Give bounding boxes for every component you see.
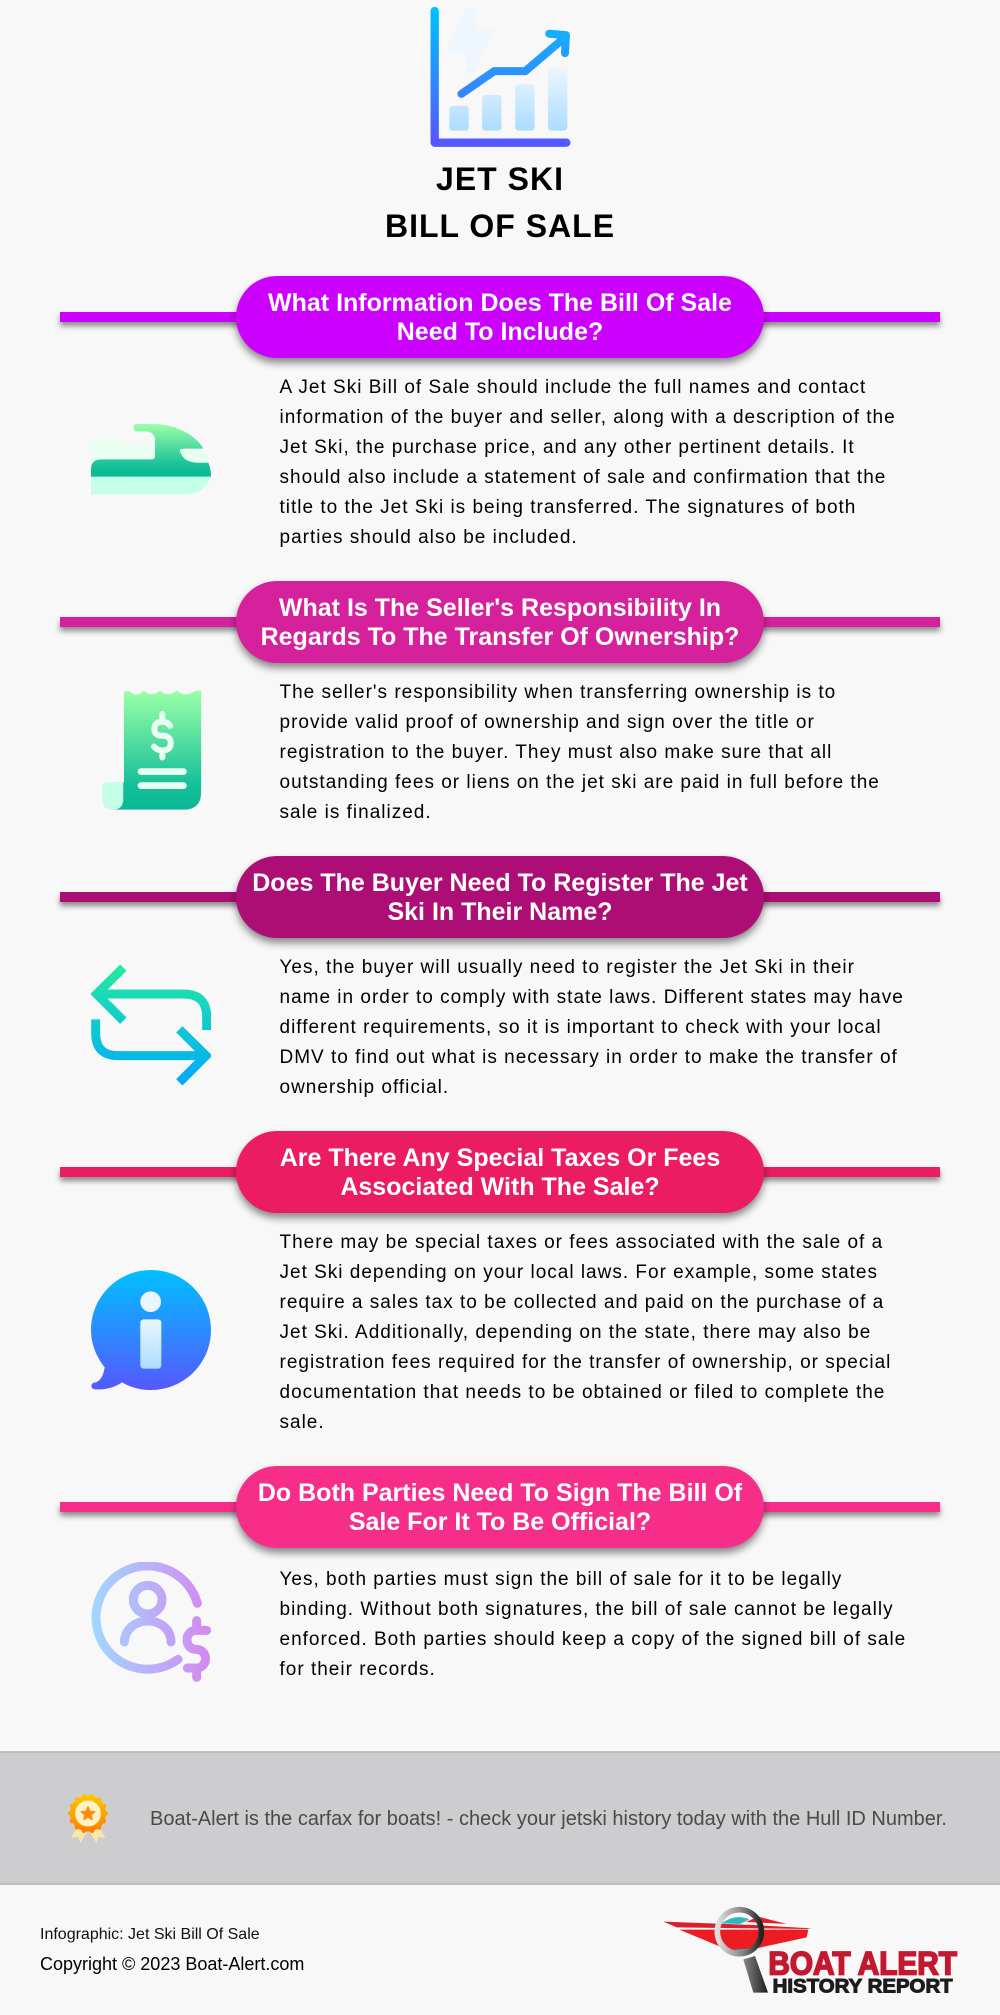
footer credit xyxy=(40,1926,304,1974)
body text: sale is finalized. xyxy=(280,802,432,823)
section heading: What Is The Seller's Responsibility In xyxy=(279,594,721,622)
section heading xyxy=(236,276,764,358)
panel: section 5 xyxy=(56,1466,944,1682)
panel: section 4 xyxy=(56,1130,944,1433)
body text: provide valid proof of ownership and sign over the title or xyxy=(280,712,815,733)
panel: section 1 xyxy=(56,276,944,548)
body text: information of the buyer and seller, along with a description of the xyxy=(280,407,896,428)
body text: outstanding fees or liens on the jet ski are paid in full before the xyxy=(280,772,880,793)
icon: info bubble xyxy=(91,1270,211,1390)
body text: There may be special taxes or fees associated with the sale of a xyxy=(280,1232,883,1253)
title xyxy=(385,161,615,244)
logo: Boat Alert History Report xyxy=(664,1906,958,1997)
body text: different requirements, so it is important to check with your local xyxy=(280,1017,882,1038)
icon: receipt xyxy=(102,690,202,810)
body text: should also include a statement of sale and confirmation that the xyxy=(280,467,886,488)
callout text: Boat-Alert is the carfax for boats! - check your jetski history today with the Hull ID Number. xyxy=(150,1808,947,1830)
section heading: Do Both Parties Need To Sign The Bill Of xyxy=(258,1479,742,1507)
section heading: Are There Any Special Taxes Or Fees xyxy=(280,1144,720,1172)
copyright: Copyright © 2023 Boat-Alert.com xyxy=(40,1954,304,1974)
section heading: Associated With The Sale? xyxy=(340,1173,660,1201)
section heading xyxy=(236,1466,764,1548)
body text: Jet Ski, the purchase price, and any other pertinent details. It xyxy=(280,437,855,458)
section heading: Does The Buyer Need To Register The Jet xyxy=(252,869,748,897)
body text xyxy=(280,957,904,1098)
body text xyxy=(280,1569,906,1680)
body text: ownership official. xyxy=(280,1077,449,1098)
section heading: Ski In Their Name? xyxy=(387,898,613,926)
body text xyxy=(280,682,880,823)
section heading: Need To Include? xyxy=(397,318,603,346)
body text: sale. xyxy=(280,1412,325,1433)
body text: Jet Ski. Additionally, depending on the state, there may also be xyxy=(280,1322,871,1343)
body text: Jet Ski depending on your local laws. For example, some states xyxy=(280,1262,878,1283)
title: BILL OF SALE xyxy=(385,208,615,244)
panel: call to action band xyxy=(0,1751,1000,1885)
icon: growth chart xyxy=(430,6,570,147)
logo: Boat Alert History Report: HISTORY REPORT xyxy=(773,1976,953,1997)
section heading xyxy=(236,856,764,938)
panel: section 2 xyxy=(56,580,944,823)
panel: section 3 xyxy=(56,856,944,1098)
body text: require a sales tax to be collected and paid on the purchase of a xyxy=(280,1292,884,1313)
body text: parties should also be included. xyxy=(280,527,578,548)
section heading: What Information Does The Bill Of Sale xyxy=(268,289,732,317)
body text: Yes, the buyer will usually need to register the Jet Ski in their xyxy=(280,957,855,978)
section heading: Sale For It To Be Official? xyxy=(349,1508,651,1536)
infographic name: Infographic: Jet Ski Bill Of Sale xyxy=(40,1926,260,1943)
section heading xyxy=(236,1131,764,1213)
body text: name in order to comply with state laws. Different states may have xyxy=(280,987,904,1008)
logo: Boat Alert History Report: BOAT ALERT xyxy=(768,1946,957,1982)
header rule xyxy=(60,892,940,902)
section heading: Regards To The Transfer Of Ownership? xyxy=(261,623,739,651)
header rule xyxy=(60,617,940,627)
section heading xyxy=(236,581,764,663)
body text xyxy=(280,377,896,548)
body text xyxy=(280,1232,891,1433)
header rule xyxy=(60,312,940,322)
icon: award medal xyxy=(68,1794,108,1843)
header rule xyxy=(60,1502,940,1512)
body text: A Jet Ski Bill of Sale should include the full names and contact xyxy=(280,377,866,398)
icon: transfer arrows xyxy=(91,965,211,1085)
icon: person with dollar xyxy=(92,1562,211,1682)
body text: documentation that needs to be obtained or filed to complete the xyxy=(280,1382,885,1403)
body text: registration fees required for the transfer of ownership, or special xyxy=(280,1352,891,1373)
body text: binding. Without both signatures, the bill of sale cannot be legally xyxy=(280,1599,894,1620)
body text: title to the Jet Ski is being transferred. The signatures of both xyxy=(280,497,856,518)
title: JET SKI xyxy=(436,161,564,197)
body text: The seller's responsibility when transferring ownership is to xyxy=(280,682,836,703)
body text: for their records. xyxy=(280,1659,436,1680)
header rule xyxy=(60,1167,940,1177)
body text: Yes, both parties must sign the bill of sale for it to be legally xyxy=(280,1569,842,1590)
body text: enforced. Both parties should keep a copy of the signed bill of sale xyxy=(280,1629,906,1650)
icon: jet ski xyxy=(91,424,211,494)
body text: DMV to find out what is necessary in order to make the transfer of xyxy=(280,1047,898,1068)
body text: registration to the buyer. They must also make sure that all xyxy=(280,742,832,763)
